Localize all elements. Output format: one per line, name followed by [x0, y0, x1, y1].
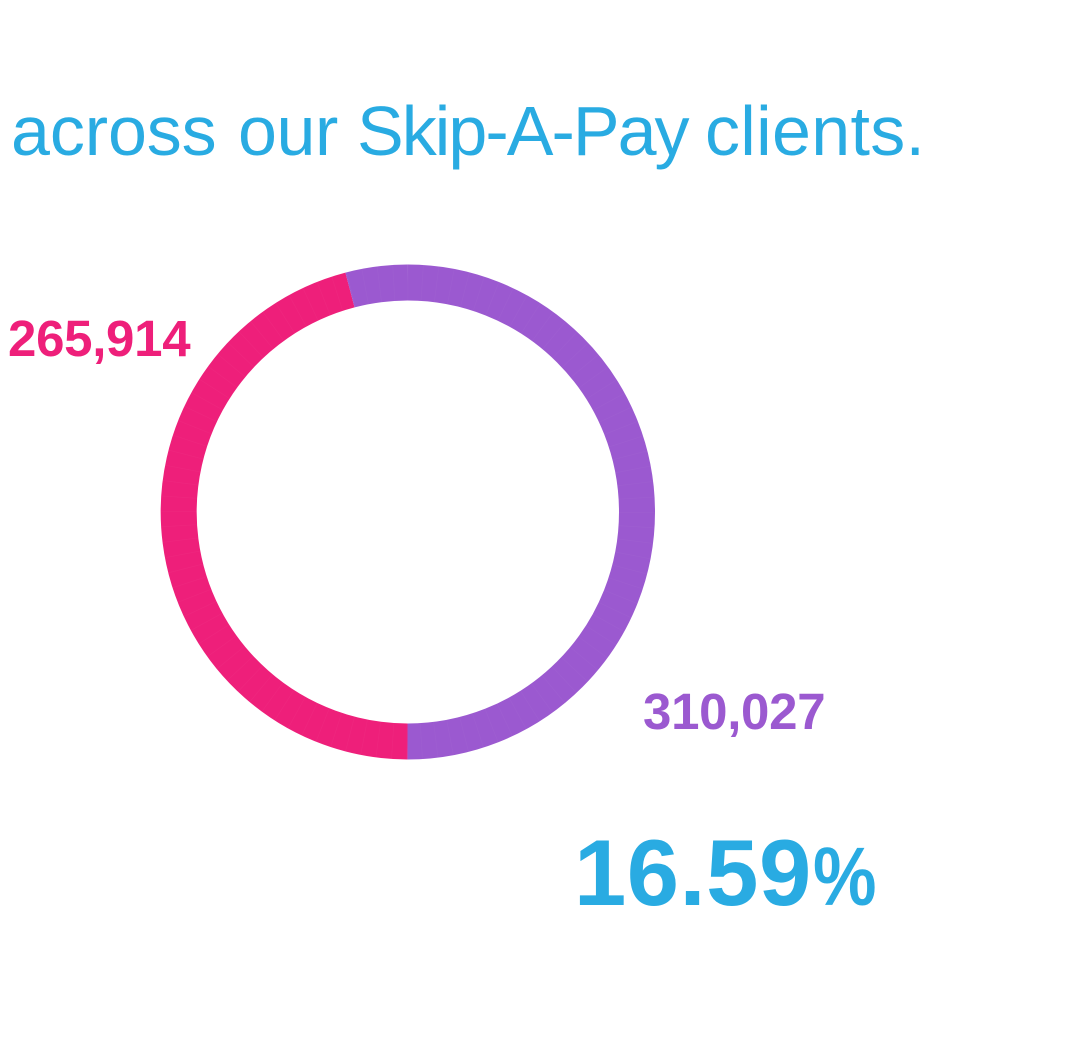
- heading: Skip-A-Pay: [357, 92, 688, 170]
- big percentage: 16.59: [574, 820, 812, 925]
- label: purple value: 310,027: [643, 683, 825, 740]
- ring segment: pink 265,914: [179, 290, 408, 742]
- ring segment: purple top-left: [350, 282, 408, 290]
- heading: clients.: [705, 92, 925, 170]
- heading: [11, 92, 925, 170]
- ring segment: purple 310,027: [408, 282, 637, 742]
- heading: across: [11, 92, 217, 170]
- big percentage: %: [813, 830, 877, 923]
- heading: our: [238, 92, 338, 170]
- label: pink value: 265,914: [8, 310, 190, 367]
